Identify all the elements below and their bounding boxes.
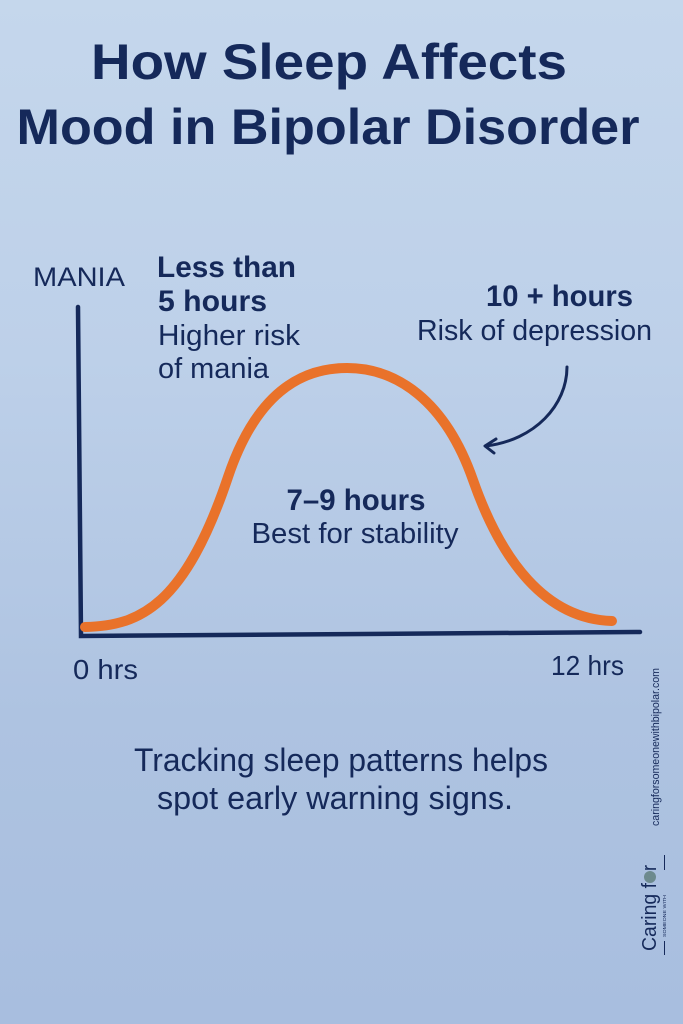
axis label: 12 hrs: 12 hrs	[551, 650, 624, 681]
footer message: spot early warning signs.	[157, 780, 513, 816]
chart axes	[78, 307, 640, 636]
website url: caringforsomeonewithbipolar.com	[650, 668, 662, 826]
logo: caring for someone with: SOMEONE WITH	[662, 895, 667, 937]
callout: less than 5 hours: Higher risk	[158, 320, 301, 352]
axis label: mania: MANIA	[33, 262, 125, 292]
footer message: Tracking sleep patterns helps	[134, 742, 548, 778]
footer message	[134, 742, 548, 816]
callout: 7-9 hours	[252, 484, 459, 550]
callout: 10+ hours	[417, 280, 652, 347]
callout: less than 5 hours: Less than	[157, 251, 296, 284]
callout: 7-9 hours: 7–9 hours	[286, 484, 426, 517]
callout: less than 5 hours: 5 hours	[158, 285, 267, 318]
logo: caring for someone with: Caring f	[639, 883, 661, 951]
axis label: 0 hrs: 0 hrs	[73, 654, 138, 685]
callout: 10+ hours: Risk of depression	[417, 315, 652, 347]
callout: less than 5 hours	[157, 251, 301, 385]
arrow: pointing to curve	[485, 367, 567, 453]
title	[16, 34, 640, 155]
sleep curve	[85, 368, 612, 627]
logo: caring for someone with: r	[639, 865, 661, 871]
callout: 10+ hours: 10 + hours	[486, 280, 633, 313]
title: How Sleep Affects	[91, 34, 567, 90]
callout: less than 5 hours: of mania	[158, 353, 270, 385]
logo: caring for someone with	[639, 855, 667, 955]
callout: 7-9 hours: Best for stability	[252, 518, 459, 550]
title: Mood in Bipolar Disorder	[16, 99, 640, 155]
